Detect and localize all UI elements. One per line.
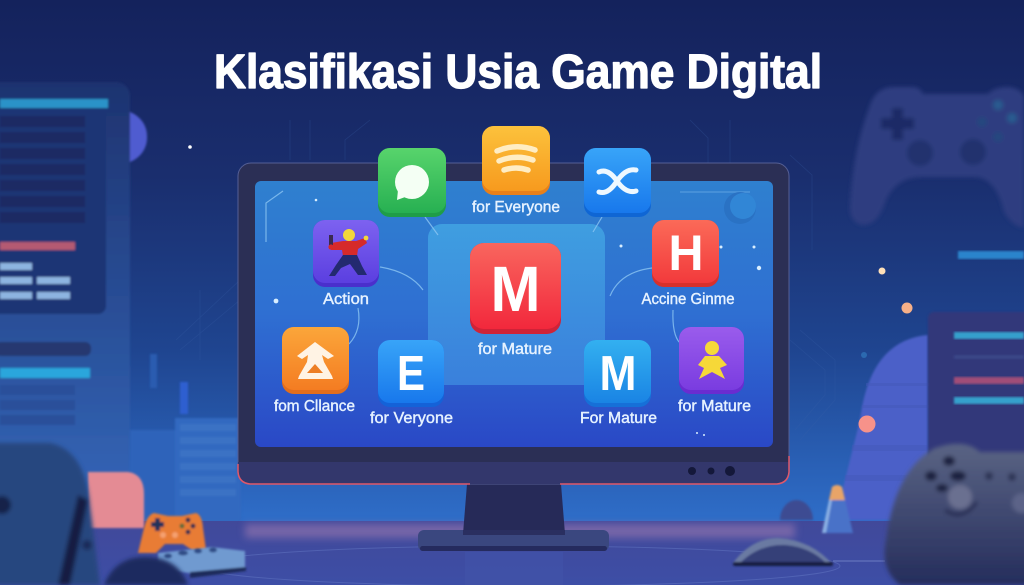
icon: purple person <box>679 327 744 394</box>
label: for Veryone: for Veryone <box>370 410 453 427</box>
pink block <box>88 472 144 528</box>
icon: cyan M <box>584 340 651 407</box>
screen sparkle dots <box>274 199 761 436</box>
title: Klasifikasi Usia Game Digital <box>214 46 822 99</box>
right background panel and shapes <box>188 145 1024 527</box>
label: fom Cllance: fom Cllance <box>274 398 355 415</box>
monitor chin <box>238 462 789 484</box>
icon: cyan M: M <box>600 347 636 401</box>
background circuit lines <box>176 120 835 440</box>
background stacked blocks <box>130 354 241 522</box>
monitor stand <box>418 484 609 585</box>
label: for Mature right: for Mature <box>678 398 751 415</box>
decorative cone <box>780 485 853 533</box>
icon: green message <box>378 148 446 217</box>
monitor buttons <box>688 466 735 476</box>
icon: red H <box>652 220 719 287</box>
background game controller <box>850 87 1024 228</box>
foreground left device <box>0 443 188 585</box>
label: Accine Ginme: Accine Ginme <box>642 291 734 308</box>
icon: central red M <box>470 243 561 334</box>
icon: central red M: M <box>490 253 540 325</box>
screen connector lines <box>266 191 750 344</box>
label: For Mature: For Mature <box>580 410 657 427</box>
label: Action: Action <box>323 291 369 308</box>
table surface <box>0 521 1024 585</box>
monitor frame <box>238 163 789 484</box>
icon: blue E <box>378 340 444 407</box>
icon: purple action figure <box>313 220 379 287</box>
central panel <box>428 224 605 385</box>
computer mouse <box>733 538 833 566</box>
label: for Mature centre: for Mature <box>478 341 552 358</box>
label: for Everyone: for Everyone <box>472 199 560 216</box>
icon: red H: H <box>668 225 704 281</box>
monitor red edge <box>238 456 789 484</box>
icon: blue shuffle <box>584 148 651 217</box>
screen circle decoration <box>724 192 756 224</box>
monitor <box>238 163 789 484</box>
icon: orange house arrow <box>282 327 349 394</box>
foreground right game controller <box>885 444 1024 585</box>
left background data panel <box>0 82 147 482</box>
screen <box>255 181 773 447</box>
keyboard <box>158 547 246 578</box>
orange game controller <box>138 513 206 553</box>
icon: blue E: E <box>397 347 425 401</box>
icon: yellow signal <box>482 126 550 195</box>
